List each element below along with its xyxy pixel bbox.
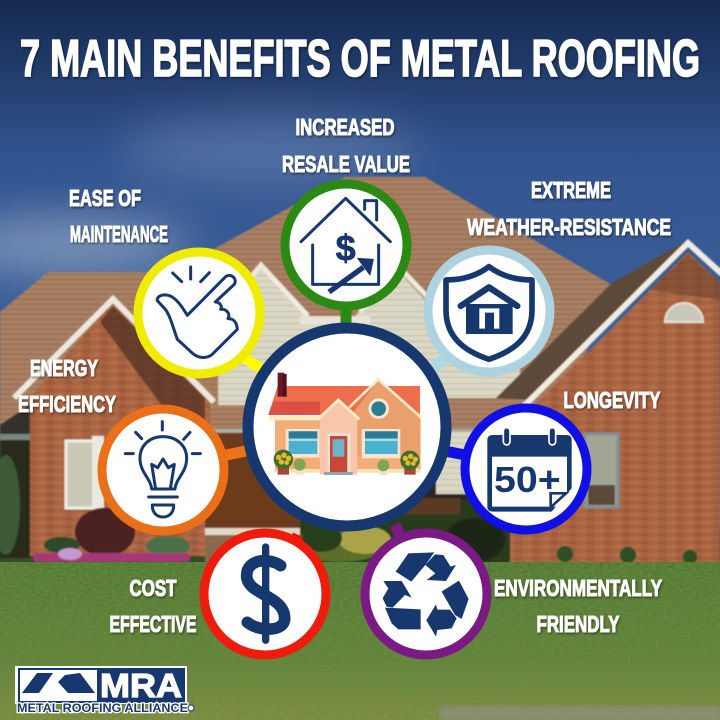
center siding <box>205 240 688 502</box>
door and porch <box>205 433 305 533</box>
circle: longevity <box>465 408 587 530</box>
ground strip behind house <box>0 530 720 566</box>
logo: Metal Roofing Alliance <box>15 666 194 715</box>
left gable brick <box>0 299 515 564</box>
circle: ease of maintenance <box>138 252 260 374</box>
logo: Metal Roofing Alliance: MRA <box>100 667 182 704</box>
label: ease of maintenance: MAINTENANCE <box>70 221 168 247</box>
label: ease of maintenance: EASE OF <box>69 185 141 211</box>
icon: recycling arrows <box>383 552 469 637</box>
label: environmentally friendly: FRIENDLY <box>536 611 620 637</box>
circle: central house <box>248 328 446 526</box>
label: increased resale value: INCREASED <box>296 114 394 140</box>
circle: cost effective <box>204 533 326 655</box>
label: cost effective <box>110 575 196 637</box>
label: ease of maintenance <box>69 185 168 247</box>
label: extreme weather-resistance: EXTREME <box>531 177 611 203</box>
icon: light bulb <box>125 422 200 517</box>
icon: shield with house <box>446 267 532 359</box>
building silhouette: shingled roofs <box>0 177 612 440</box>
lawn <box>0 562 720 720</box>
dark right roof slope <box>496 240 688 400</box>
label: environmentally friendly <box>494 575 662 637</box>
left window <box>66 441 96 508</box>
circle: extreme weather-resistance <box>428 250 550 372</box>
label: environmentally friendly: ENVIRONMENTALLY <box>494 575 662 601</box>
label: energy efficiency: ENERGY <box>30 355 98 381</box>
icon: dollar sign <box>247 543 285 644</box>
icon: calendar 50+: 50+ <box>494 459 561 500</box>
connector spokes <box>222 300 470 560</box>
icon: house illustration <box>268 373 421 475</box>
label: increased resale value: RESALE VALUE <box>282 151 410 177</box>
label: cost effective: EFFECTIVE <box>110 611 196 637</box>
icon: house with dollar and rising arrow: $ <box>336 228 356 269</box>
label: extreme weather-resistance <box>467 177 671 240</box>
label: longevity: LONGEVITY <box>564 387 660 413</box>
circle: increased resale value <box>285 184 407 306</box>
icon: finger snap hand <box>157 267 237 357</box>
label: increased resale value <box>282 114 410 177</box>
right gable brick <box>510 243 720 566</box>
circle: environmentally friendly <box>365 533 487 655</box>
circle: energy efficiency <box>102 409 224 531</box>
label: energy efficiency: EFFICIENCY <box>18 391 116 417</box>
bushes and flowers <box>33 508 697 564</box>
label: energy efficiency <box>18 355 116 417</box>
label: cost effective: COST <box>130 575 176 601</box>
logo: Metal Roofing Alliance: METAL ROOFING ALLIANCE <box>17 701 188 715</box>
